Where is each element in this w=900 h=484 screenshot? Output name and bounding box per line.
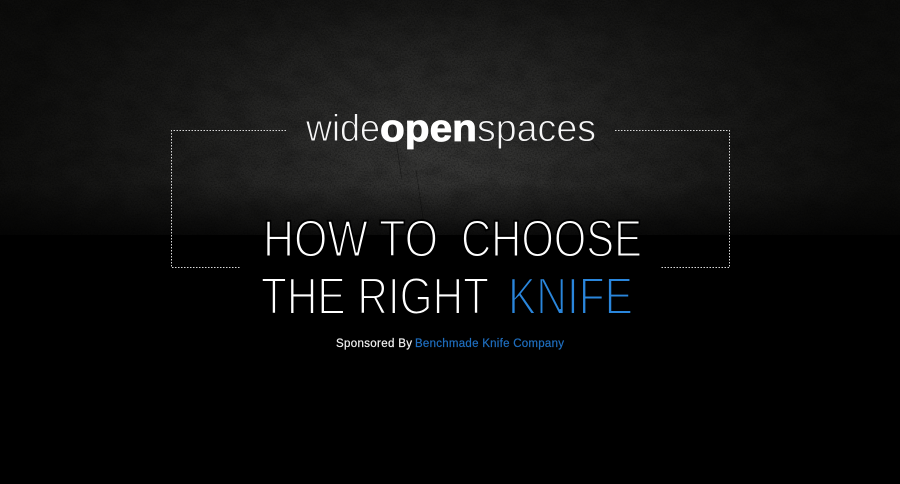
- title: How to choose the right knife: [261, 210, 642, 326]
- title: How to choose the right knife: CHOOSE: [461, 210, 642, 268]
- sponsor line: [336, 338, 564, 350]
- title: How to choose the right knife: KNIFE: [508, 268, 633, 326]
- title: How to choose the right knife: HOW TO: [263, 210, 438, 268]
- sponsor line: Sponsored By: [336, 338, 412, 350]
- logo: wideopenspaces: [305, 108, 596, 150]
- sponsor line: Benchmade Knife Company: [415, 338, 564, 350]
- dotted frame around the heading: [172, 130, 730, 268]
- logo: wideopenspaces: spaces: [477, 108, 596, 150]
- logo: wideopenspaces: wide: [305, 108, 380, 150]
- logo: wideopenspaces: open: [380, 108, 477, 150]
- title: How to choose the right knife: THE RIGHT: [261, 268, 489, 326]
